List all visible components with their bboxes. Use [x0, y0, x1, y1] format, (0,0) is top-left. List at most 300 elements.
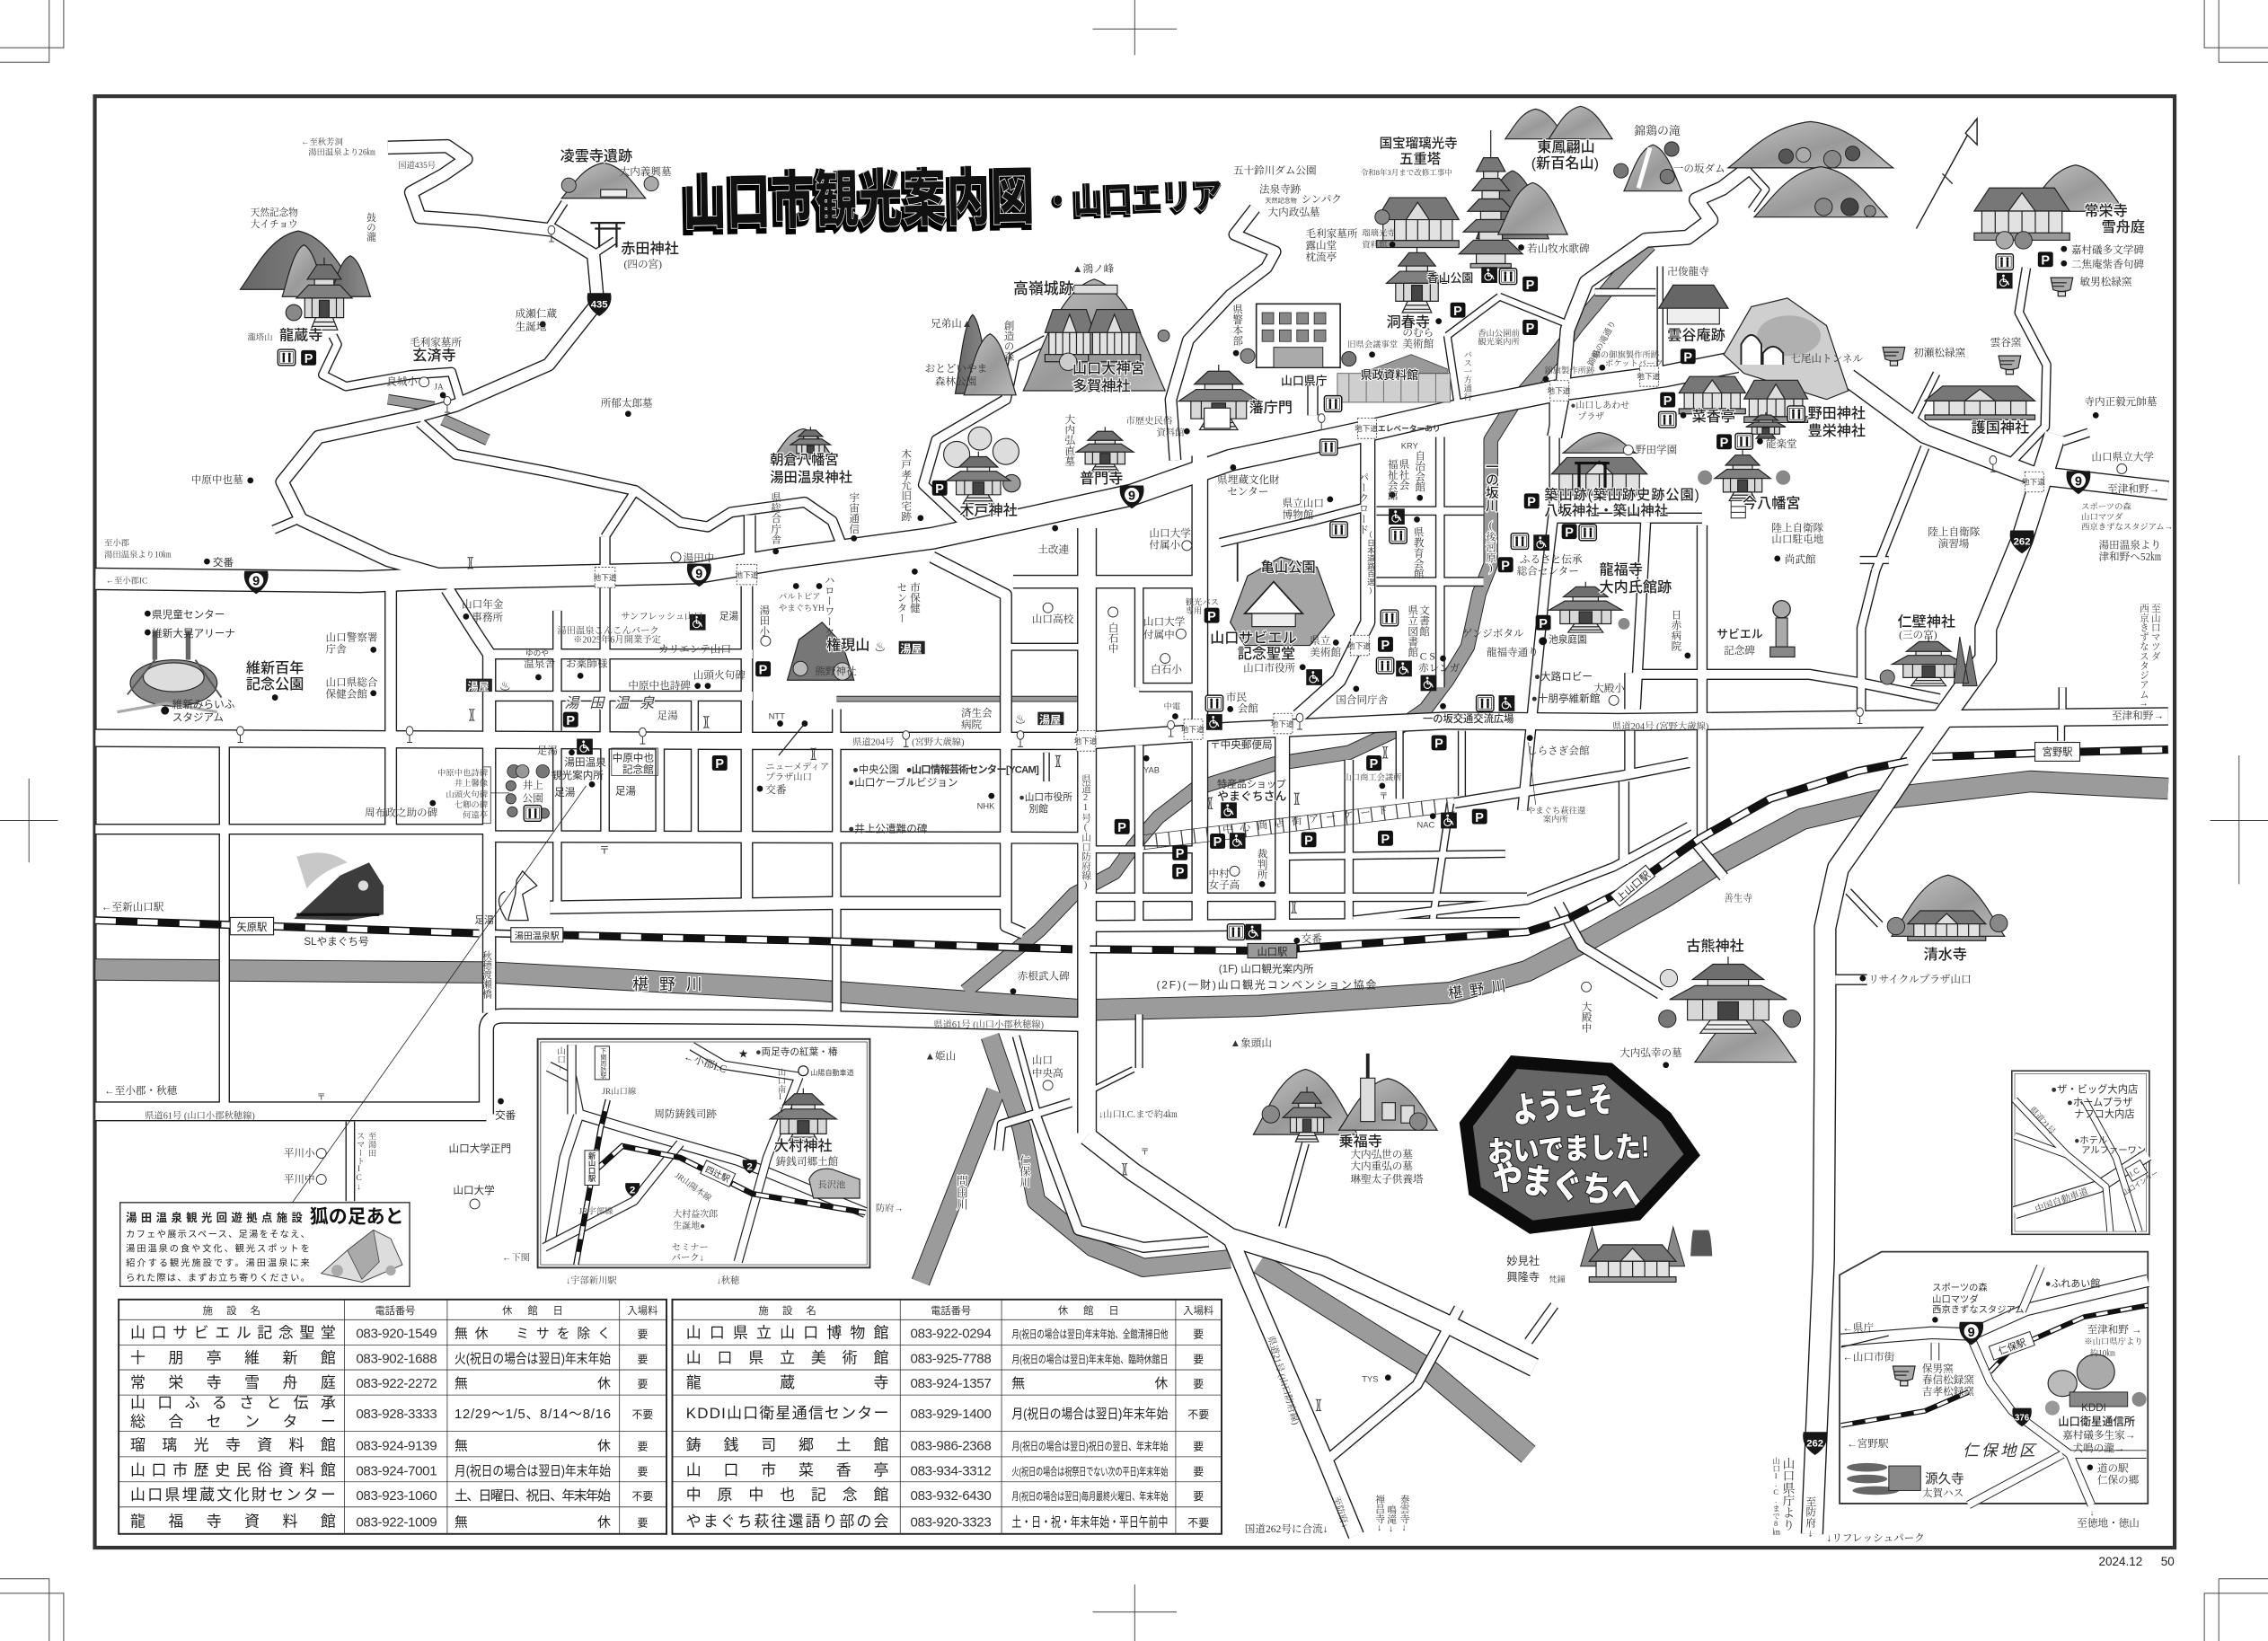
labels: central north area: 瑠璃光寺 [1362, 228, 1396, 239]
labels: northeast area: 二焦庵紫香句碑 [2071, 258, 2144, 270]
labels: Yuda Onsen area: 維新百年 [246, 660, 304, 676]
labels: city centre: 中電 [1164, 701, 1180, 711]
inset sub: labels: 道の駅 [2097, 1463, 2129, 1474]
labels: city centre: 病院 [961, 718, 983, 730]
table rows: 山口市歴史民俗資料館 [130, 1462, 336, 1479]
labels: northeast area: 敏男松緑窯 [2080, 275, 2132, 287]
title: 山口市観光案内図 [682, 162, 1035, 238]
labels: northwest area: 大内義興墓 [620, 165, 672, 178]
labels: city centre: 市民 [1226, 691, 1247, 703]
labels: Yuda Onsen area [101, 611, 829, 1203]
table rows: 要 [1193, 1354, 1204, 1366]
railway line [95, 750, 2168, 950]
labels: city centre: 〒 [1380, 791, 1388, 801]
table rows: 瑠璃光寺資料館 [130, 1436, 336, 1453]
table header: 施 設 名 [758, 1304, 816, 1317]
table rows: 無 休 [454, 1376, 611, 1391]
illustration: Higashi Hobenzan hills [1498, 106, 1612, 234]
labels: city centre: 熊野神社 [815, 665, 857, 677]
inset sub: route 2 shields [625, 1160, 757, 1197]
labels: northwest area: 毛利家墓所 [410, 336, 462, 348]
illustration: Kinkei waterfall [1614, 142, 1681, 191]
illustration: Shimizudera temple [1887, 875, 2008, 940]
P parking icons: P [1501, 559, 1510, 573]
labels: southwest and south area: 禅昌寺↓ [1374, 1495, 1384, 1533]
labels: river names: 仁保川 [1019, 1154, 1031, 1187]
labels: city centre: ♨ [874, 640, 886, 655]
table: facilities right [672, 1300, 1222, 1534]
table rows: やまぐち萩往還語り部の会 [686, 1513, 888, 1531]
underpass markers: 地下道 [2022, 477, 2045, 487]
P parking icons: P [1176, 847, 1185, 861]
inset: Ouchi area and Chugoku expressway [2012, 1071, 2159, 1234]
labels: northeast area: 八坂神社・築山神社 [1544, 503, 1668, 519]
inset: Nihō district [1840, 1252, 2148, 1505]
labels: city centre: ♨ [1015, 713, 1027, 728]
labels: southwest and south area: 〒 [1141, 1148, 1149, 1158]
labels: northwest area: 交番 [213, 557, 234, 569]
inset sub: labels: アルファーワン [2081, 1146, 2146, 1156]
labels: southwest and south area: ↓山口I.C.まで約4㎞ [1099, 1108, 1178, 1120]
table rows: 083-922-1009 [356, 1515, 437, 1531]
labels: northeast area: 記念碑 [1724, 644, 1755, 657]
P parking icons: P [2041, 254, 2050, 269]
labels: Yuda Onsen area: 七卿の碑 [454, 799, 489, 810]
labels: Yuda Onsen area: ゆのや [525, 648, 549, 657]
labels: southwest and south area: 山口I.C.まで8㎞ [1772, 1457, 1780, 1535]
labels: southwest and south area: 交番 [495, 1109, 516, 1121]
P parking icons: P [1117, 821, 1126, 835]
labels: northeast area: 古熊神社 [1686, 939, 1744, 954]
labels: Yuda Onsen area: 交番 [765, 783, 787, 796]
labels: northeast area: スポーツの森 [2081, 501, 2131, 512]
labels: city centre: 裁判所 [1257, 847, 1268, 880]
table: facilities left [119, 1300, 666, 1534]
labels below Niho inset: 至徳地・徳山 [2077, 1517, 2140, 1530]
labels: northwest area: 龍蔵寺 [279, 328, 322, 344]
underpass markers: 地下道 [594, 572, 617, 582]
illustration: Nibe shrine [1880, 637, 1977, 686]
P parking icons: P [1453, 304, 1462, 319]
labels: city centre: 観光バス [1186, 596, 1219, 607]
labels: city centre: やまぐちYH [779, 604, 825, 613]
table rows: 総合センター [130, 1414, 336, 1431]
labels: southwest and south area: 平川小 [284, 1146, 315, 1159]
illustration: Takamine castle and Yamaguchi Daijingu [1023, 279, 1169, 391]
labels: Yuda Onsen area: 足湯 [719, 612, 738, 622]
labels: city centre: 福祉会館 [1387, 458, 1399, 500]
labels: southwest and south area: 琳聖太子供養塔 [1350, 1172, 1424, 1185]
labels: southwest and south area: 山口大学正門 [449, 1142, 511, 1154]
table rows: 083-923-1060 [356, 1488, 437, 1504]
labels: northeast area: しらさぎ会館 [1527, 744, 1590, 756]
underpass markers: 地下道 [1637, 371, 1661, 381]
inset sub: labels: ←宮野駅 [1847, 1437, 1889, 1450]
labels: city centre: 赤レンガ [1418, 662, 1461, 675]
labels: northeast area: 山口県立大学 [2091, 450, 2154, 463]
inset sub: labels: 山口南I.C [776, 1067, 786, 1120]
labels: city centre: 会館 [1238, 702, 1258, 715]
inset sub: station boxes: 四辻駅 [703, 1164, 732, 1185]
labels: city centre: NHK [977, 802, 995, 811]
labels: northeast area: 雪舟庭 [2102, 219, 2145, 235]
table rows: 月(祝日の場合は翌日)年末年始 [1011, 1407, 1169, 1422]
labels: city centre: 白石中 [1108, 622, 1119, 654]
welcome sign: おいでました! [1487, 1130, 1650, 1169]
facility description: られた際は、まずお立ち寄りください。 [126, 1272, 310, 1284]
table rows: 無 休 [1011, 1376, 1169, 1391]
labels: city centre: (2F)(一財)山口観光コンベンション協会 [1156, 978, 1376, 991]
labels: northeast area: 池泉庭園 [1549, 633, 1587, 645]
underpass markers: 地下道 [1073, 736, 1098, 746]
P parking icons: P [1526, 322, 1535, 336]
labels: city centre: ●中央公園 [852, 763, 899, 775]
labels: southwest and south area: 興隆寺 [1506, 1270, 1540, 1284]
labels: northeast area: 大殿中 [1581, 1001, 1593, 1033]
labels: Yuda Onsen area: 庁舎 [326, 643, 347, 656]
underpass markers: 地下道 [1355, 423, 1378, 433]
illustration: Gongenyama hill [788, 622, 854, 680]
labels: city centre: 交番 [1302, 932, 1322, 945]
labels: Yuda Onsen area: 観光案内所 [552, 769, 604, 781]
inset sub: kiln bowl [1893, 1366, 1915, 1386]
table rows: 不要 [632, 1408, 653, 1421]
labels: city centre: 山口市役所 [1243, 662, 1296, 675]
P parking icons [301, 251, 2053, 880]
labels: southwest and south area: 鳴滝↓ [1386, 1504, 1396, 1534]
labels: Yuda Onsen area: 湯田温泉こんこんパーク [557, 625, 659, 637]
underpass markers: 地下道 [1547, 385, 1571, 395]
table rows: 083-932-6430 [911, 1488, 992, 1504]
labels: northwest area: 湯田温泉より10㎞ [104, 549, 172, 560]
labels: central north area: 香山公園 [1427, 271, 1473, 285]
labels: city centre: ハローワーク [824, 575, 835, 637]
table rows: 山口県立山口博物館 [686, 1324, 888, 1341]
labels: Yuda Onsen area: 維新みらいふ [172, 698, 235, 710]
facility description: 湯田温泉の食や文化、観光スポットを [126, 1243, 310, 1255]
P parking icons: P [1683, 350, 1692, 365]
table rows: 要 [637, 1517, 648, 1530]
table rows: 龍福寺資料館 [130, 1513, 336, 1531]
illustration: Xavier monument [1770, 601, 1795, 657]
labels: northeast area: ●山口しあわせ [1570, 399, 1629, 410]
table rows [130, 1324, 653, 1531]
inset sub: KDDI satellite dishes [2045, 1354, 2147, 1416]
labels: southwest and south area: 妙見社 [1506, 1254, 1540, 1267]
labels: southwest and south area: TYS [1362, 1375, 1378, 1384]
labels: Yuda Onsen area: 何遠亭 [463, 809, 488, 820]
labels: southwest and south area: ↓リフレッシュパーク [1827, 1532, 1925, 1544]
labels: central north area: 資料館 [1156, 427, 1185, 438]
table rows: 月(祝日の場合は翌日)年末年始、臨時休館日 [1011, 1354, 1168, 1366]
labels: city centre: 湯田小 [758, 604, 770, 636]
labels: northwest area: 事務所 [472, 611, 503, 623]
labels: city centre: 自治会館 [1414, 450, 1425, 491]
table rows: 山口県埋蔵文化財センター [130, 1487, 336, 1504]
labels: northwest area: 天然記念物 [251, 207, 298, 218]
table rows: 083-924-1357 [911, 1376, 992, 1391]
labels: central north area: 県警本部 [1231, 304, 1243, 346]
inset sub: labels: 仁保地区 [1963, 1442, 2037, 1460]
table rows: 鋳銭司郷土館 [686, 1436, 888, 1453]
labels: Yuda Onsen area: サンフレッシュ山口 [621, 611, 703, 622]
illustration: Prefectural archives building [1337, 355, 1451, 402]
inset sub: route 2 shields: 2 [630, 1185, 635, 1195]
inset sub: labels [2027, 1082, 2159, 1215]
labels: Yuda Onsen area: 足湯 [537, 745, 558, 756]
inset: Omura shrine area [538, 1039, 869, 1267]
P parking icons: P [566, 714, 575, 728]
illustration: Furukuma shrine [1659, 957, 1801, 1063]
P parking icons: P [1434, 737, 1443, 752]
station boxes: 宮野駅 [2043, 746, 2072, 758]
table rows: 083-920-1549 [356, 1326, 437, 1341]
labels: city centre: ●山口ケーブルビジョン [848, 776, 958, 789]
table rows: 火(祝日の場合は翌日)年末年始 [454, 1352, 611, 1367]
table rows: 083-920-3323 [911, 1515, 992, 1531]
labels: northeast area: 演習場 [1938, 537, 1970, 550]
labels: city centre: 博物館 [1283, 508, 1314, 521]
table header: 休 館 日 [502, 1305, 563, 1317]
facility description: 紹介する観光施設です。湯田温泉に来 [126, 1257, 310, 1269]
labels: southwest and south area: 至湯田 [366, 1132, 376, 1157]
illustration: Rurikoji pagoda and hall [1375, 130, 1549, 268]
table header: 施 設 名 [203, 1304, 260, 1317]
table header [203, 1304, 657, 1317]
labels: northeast area: 野田神社 [1808, 406, 1866, 422]
labels: city centre: 権現山 [826, 637, 869, 653]
labels: Yuda Onsen area: 湯屋 [467, 680, 490, 693]
labels: city centre: 山口高校 [1032, 613, 1074, 625]
labels: northwest area: 生誕地 [516, 320, 547, 332]
footer date and page number: 2024.12 [2098, 1555, 2142, 1568]
table rows: 火(祝日の場合は祝祭日でない次の平日)年末年始 [1011, 1466, 1168, 1478]
labels: northeast area: 初瀬松緑窯 [1913, 346, 1966, 358]
labels: central north area: 多賀神社 [1072, 378, 1130, 394]
labels: central north area: 森林公園 [935, 375, 976, 388]
labels: northwest area: 赤田神社 [621, 241, 679, 257]
labels: city centre: 市保健 [909, 581, 921, 613]
underpass markers: 地下道 [1347, 640, 1371, 650]
labels: Yuda Onsen area: 記念公園 [246, 676, 304, 693]
table rows: 083-924-9139 [356, 1438, 437, 1453]
inset sub: Niho station: 仁保駅 [1997, 1337, 2028, 1357]
labels: city centre: 国合同庁舎 [1336, 693, 1389, 706]
labels: northeast area: 錦鶏の滝 [1634, 125, 1681, 137]
labels: city centre: (日本道路百選) [1366, 530, 1375, 595]
labels: central north area: 山口大神宮 [1072, 361, 1145, 377]
station boxes: 矢原駅 [236, 921, 267, 933]
labels: city centre: 付属小 [1149, 539, 1181, 551]
table rows: 083-922-0294 [911, 1326, 992, 1341]
illustration: Ryufukuji temple [1549, 582, 1629, 632]
labels: Yuda Onsen area: 山口警察署 [326, 631, 378, 644]
labels: northeast area: 七尾山トンネル [1790, 352, 1863, 365]
labels: northeast area: 龍福寺 [1600, 562, 1643, 578]
inset sub: labels: 源久寺 [1925, 1471, 1964, 1487]
labels: northeast area: 至津和野→ [2112, 710, 2164, 722]
inset sub: Omura shrine illustration [770, 1089, 836, 1143]
labels: northwest area: ←至秋芳洞 [301, 137, 343, 147]
labels: northwest area: 鼓の瀧 [366, 212, 375, 242]
inset sub: station boxes: 新山口駅 [587, 1151, 596, 1183]
labels: central north area: 洞春寺 [1387, 314, 1430, 331]
table rows: 要 [637, 1440, 648, 1452]
labels: northeast area: 陸上自衛隊 [1771, 521, 1824, 534]
labels: city centre: センター [896, 582, 907, 623]
illustration: Kido shrine [944, 427, 1020, 504]
facility house illustration [322, 1230, 402, 1282]
labels: city centre: 赤根武人碑 [1018, 970, 1070, 983]
illustration: Prefectural office building [1240, 304, 1356, 367]
labels: city centre: 特産品ショップ [1217, 777, 1286, 790]
inset sub: labels: ←県庁 [1842, 1321, 1874, 1334]
labels: city centre: 文書館 [1418, 604, 1430, 636]
inset sub: labels: 鋳銭司郷土館 [776, 1155, 839, 1168]
table rows: 山口サビエル記念聖堂 [130, 1324, 336, 1341]
labels: northeast area: 野田学園 [1636, 444, 1677, 455]
labels: southwest and south area: 乗福寺 [1339, 1134, 1382, 1150]
table header [758, 1304, 1213, 1317]
north arrow [1916, 119, 1977, 229]
labels: northeast area: 大殿小 [1593, 682, 1625, 694]
location dots [145, 242, 2099, 1381]
labels around inset: ←下関 [502, 1252, 530, 1263]
table header: 入場料 [1183, 1304, 1213, 1317]
P parking icons: P [1176, 866, 1185, 880]
labels: northwest area: 維新大晃アリーナ [152, 627, 235, 640]
labels: river names: 錦鶏の滝通り [1585, 319, 1619, 368]
labels: Yuda Onsen area: カリエンテ山口 [658, 644, 731, 656]
inset sub: labels: ※山口県庁より [2084, 1337, 2143, 1347]
labels: southwest and south area: 国道262号に合流↓ [1245, 1522, 1328, 1535]
labels: city centre: 女子高 [1208, 878, 1240, 891]
inset sub: labels: 春信松録窯 [1922, 1373, 1974, 1386]
labels: northeast area: 湯田温泉より [2098, 540, 2161, 551]
labels: Yuda Onsen area: 保健会館 [326, 688, 367, 701]
station boxes: 上山口駅 [1614, 869, 1653, 904]
labels: city centre: (宮野大歳線) [912, 737, 965, 748]
labels: city centre: 県教育会館 [1413, 526, 1425, 578]
facility heading: 狐の足あと [310, 1206, 404, 1227]
labels: city centre: YAB [1143, 765, 1160, 774]
labels around inset: ↓秋穂 [717, 1275, 740, 1286]
labels: city centre: ゲンジボタル [1461, 628, 1524, 640]
labels: city centre: 白石小 [1151, 663, 1182, 675]
labels: southwest and south area: ←至小郡・秋穂 [104, 1084, 178, 1097]
labels: city centre: 中心商店街アーケード [1222, 804, 1389, 836]
labels: northeast area: 山口マツダ [2081, 511, 2123, 522]
labels: southwest and south area [104, 1019, 1925, 1544]
labels: Yuda Onsen area: 足湯 [554, 787, 576, 798]
table rows: 山口市菜香亭 [686, 1462, 888, 1479]
inset sub: labels: ●ふれあい館 [2045, 1277, 2100, 1289]
inset sub: labels: 犬鳴の瀧→ [2072, 1442, 2124, 1454]
inset sub: labels: ★ [738, 1048, 748, 1062]
illustration: Fumonji temple [1076, 427, 1134, 472]
labels: central north area: 五十鈴川ダム公園 [1233, 163, 1317, 176]
labels: central north area: 五重塔 [1399, 152, 1442, 167]
inset sub: labels: 山口衛星通信所 [2058, 1415, 2135, 1428]
labels: city centre: 山口サビエル [1210, 630, 1297, 646]
labels: northeast area: 県道204号 (宮野大歳線) [1612, 720, 1708, 732]
labels: northwest area: 宇宙通信 [848, 491, 860, 534]
table header: 電話番号 [375, 1305, 415, 1317]
inset sub: labels: 山口マツダ [1932, 1293, 1979, 1305]
illustration: Unkoku-an ruins [1659, 285, 1728, 324]
inset sub: labels: 吉孝松録窯 [1922, 1385, 1974, 1398]
table rows: 山口ふるさと伝承 [130, 1395, 336, 1412]
P parking icons: P [1207, 610, 1216, 624]
inset sub: Niho station [1989, 1331, 2034, 1360]
labels: southwest and south area: 中央高 [1032, 1067, 1063, 1080]
welcome sign [1466, 1063, 1692, 1227]
labels: Yuda Onsen area: プラザ山口 [765, 771, 812, 782]
illustration: SL Yamaguchi steam locomotive [294, 852, 384, 921]
table rows: 083-934-3312 [911, 1464, 992, 1479]
labels: northeast area: 能楽堂 [1766, 437, 1797, 450]
labels: city centre: ●山口市役所 [1019, 791, 1072, 803]
P parking icons: P [715, 757, 724, 772]
labels: northeast area: ●大路ロビー [1534, 670, 1593, 683]
labels: southwest and south area: 山口 [1032, 1054, 1053, 1066]
station boxes: 湯田温泉駅 [515, 931, 560, 942]
table rows: 083-902-1688 [356, 1352, 437, 1367]
labels: central north area: 高嶺城跡 [1013, 280, 1074, 297]
welcome sign: やまぐちへ [1490, 1158, 1644, 1214]
inset sub: labels [555, 1045, 854, 1263]
labels: city centre: 県立図書館 [1407, 604, 1418, 657]
inset sub: labels: 山陽自動車道 [810, 1068, 854, 1077]
labels: northeast area: 錦旗製作所跡 [1544, 366, 1595, 376]
labels: city centre: 専用 [1186, 605, 1202, 616]
labels: central north area: 普門寺 [1080, 471, 1123, 487]
labels: central north area: 観光案内所 [1478, 336, 1521, 347]
station boxes [230, 742, 2080, 958]
labels: central north area: 露山堂 [1305, 239, 1337, 251]
rivers [95, 244, 2168, 1454]
labels: northeast area: 常栄寺 [2084, 203, 2128, 219]
labels: Yuda Onsen area: スタジアム [172, 711, 224, 723]
inset sub: labels: 西京きずなスタジアム [1932, 1304, 2024, 1315]
illustration: Saikotei and Noda shrine [1679, 376, 1808, 438]
labels: southwest and south area: 平川中 [284, 1172, 315, 1185]
inset sub: labels: ●両足寺の紅葉・椿 [755, 1046, 838, 1057]
wheelchair icons [577, 267, 2013, 940]
inset sub: labels: 約10㎞ [2090, 1348, 2115, 1359]
labels: city centre: センター [1227, 486, 1268, 498]
labels: northwest area: 湯田中 [684, 551, 714, 564]
table rows: 常栄寺雪舟庭 [130, 1374, 336, 1391]
road shields: 262 [2014, 537, 2030, 548]
labels: northeast area: 雲谷窯 [1990, 336, 2022, 348]
road shields: 9 [1128, 490, 1135, 504]
arcade hatching: central shopping street [1143, 798, 1454, 850]
table rows: 山口県立美術館 [686, 1350, 888, 1367]
station boxes: 山口駅 [1257, 946, 1287, 957]
labels: northwest area: 中原中也墓 [191, 473, 243, 486]
table rows: 月(祝日の場合は翌日)毎月最終火曜日、年末年始 [1011, 1490, 1168, 1503]
illustration: Ishin Mirai-fu stadium [118, 631, 222, 712]
table rows: 要 [1193, 1490, 1204, 1503]
table rows: 月(祝日の場合は翌日)祝日の翌日、年末年始 [1011, 1440, 1168, 1452]
labels: northeast area: (新百名山) [1531, 155, 1599, 172]
labels: northwest area: 朝倉八幡宮 [770, 453, 839, 468]
table rows [686, 1324, 1209, 1531]
labels: northeast area: ●十朋亭維新館 [1531, 692, 1601, 704]
labels: Yuda Onsen area: 記念館 [622, 763, 654, 775]
table rows: 無 休 [454, 1438, 611, 1453]
